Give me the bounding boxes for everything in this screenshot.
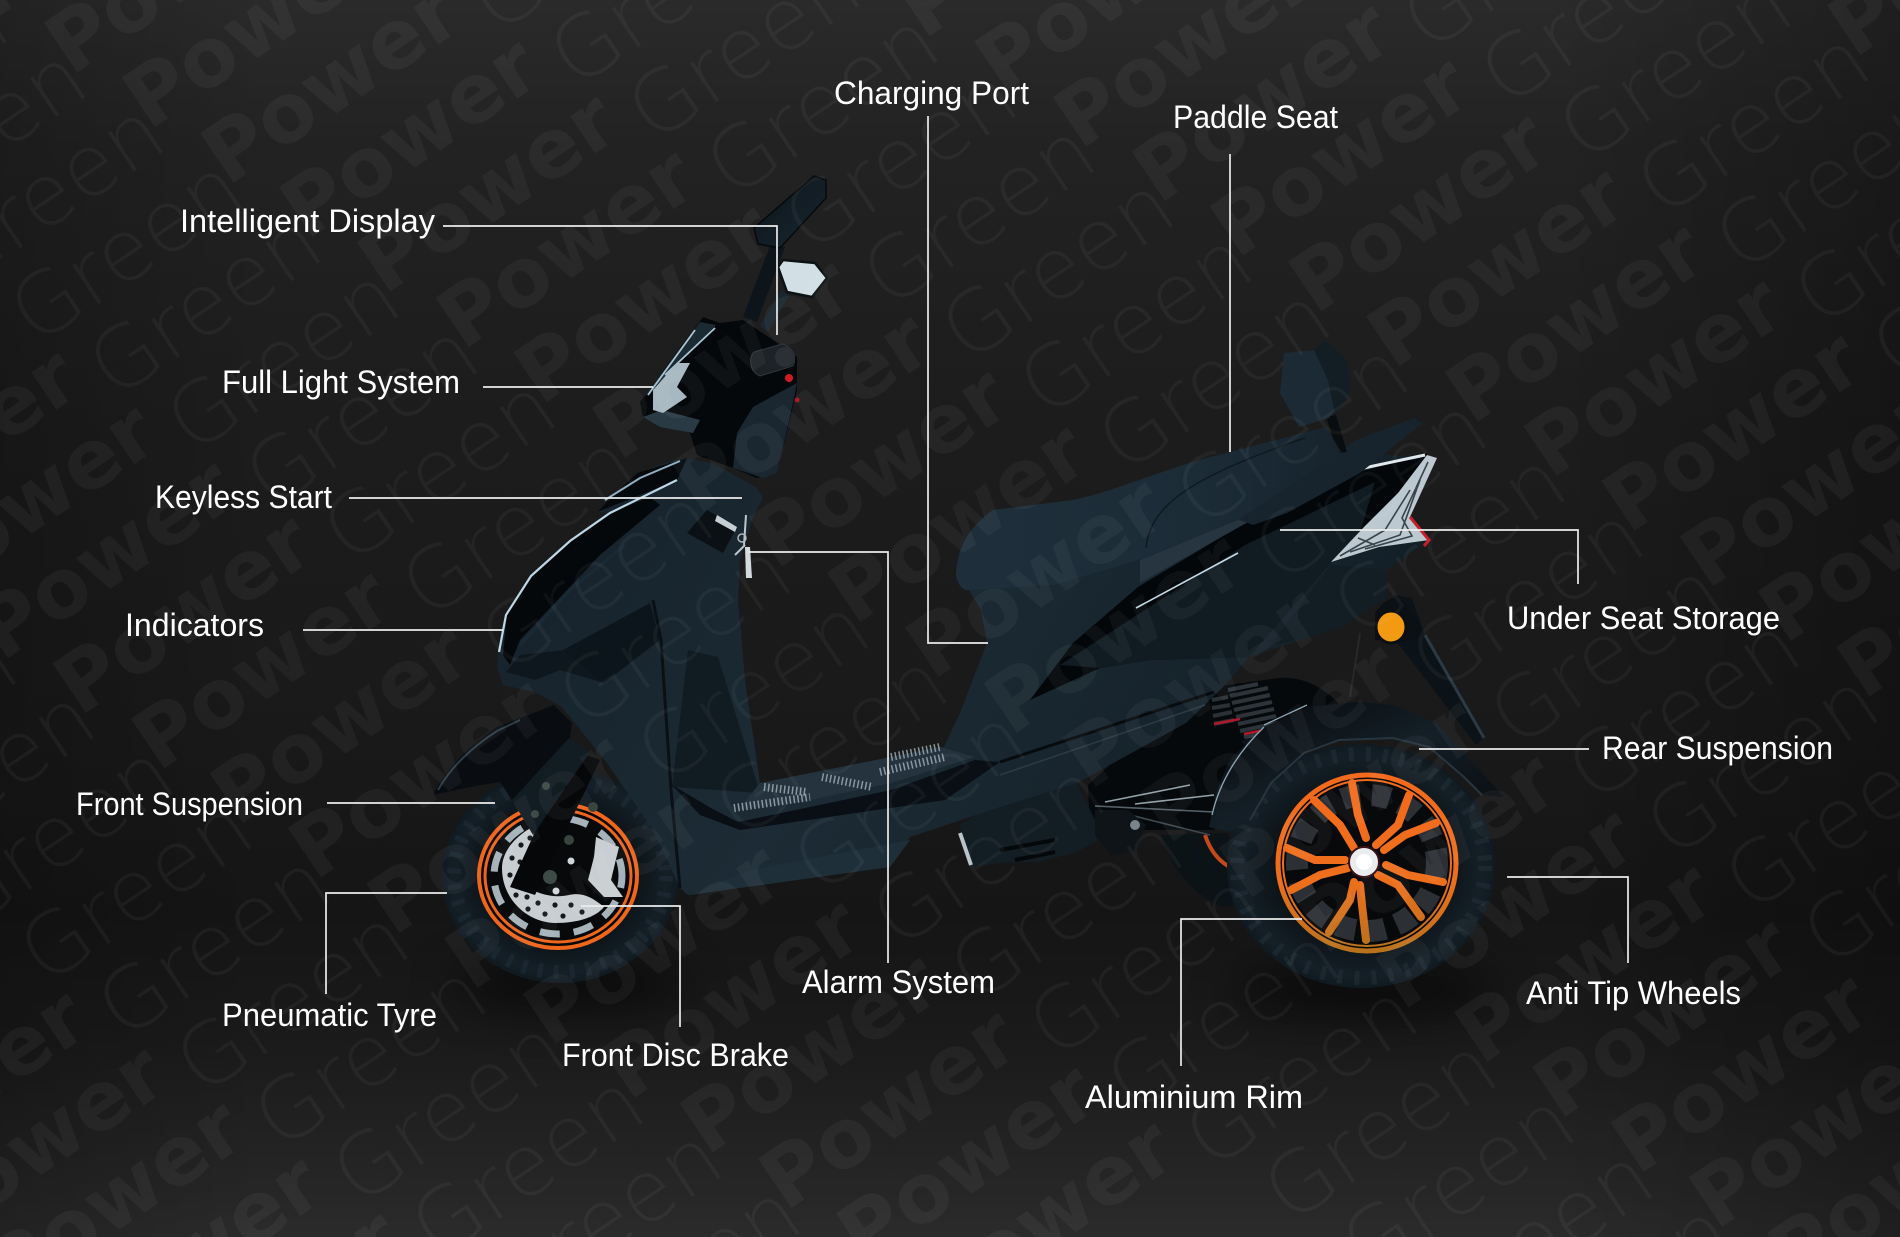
scooter body — [497, 452, 1433, 895]
callout: Front Suspension: Front Suspension — [76, 786, 303, 822]
watermark pattern: Green — [1167, 962, 1436, 1189]
watermark pattern: Power — [38, 493, 330, 734]
glove box and key — [687, 510, 752, 578]
callout: Pneumatic Tyre: Pneumatic Tyre — [222, 997, 437, 1033]
callout: Charging Port: Charging Port — [834, 75, 1029, 111]
watermark pattern: Green — [1158, 321, 1427, 547]
tail light — [1331, 455, 1437, 562]
watermark pattern: Power — [351, 714, 644, 954]
watermark pattern: Green — [149, 247, 418, 473]
watermark pattern: Green — [80, 832, 348, 1058]
callout: Full Light System: Full Light System — [222, 364, 460, 400]
watermark pattern: Power — [1509, 256, 1801, 497]
reflector mount — [1375, 595, 1425, 642]
cockpit panel — [733, 383, 797, 478]
watermark pattern: Green — [0, 138, 261, 364]
callout: Intelligent Display — [180, 203, 777, 335]
rear strut and wire — [1350, 595, 1484, 745]
watermark pattern: Power — [734, 347, 1026, 587]
tail black wedge — [1030, 453, 1433, 700]
watermark pattern: Green — [71, 192, 340, 418]
callout: Pneumatic Tyre — [222, 893, 447, 1033]
front shield black and highlights — [499, 458, 687, 665]
tail top cover — [1240, 418, 1423, 525]
callout: Keyless Start: Keyless Start — [155, 479, 332, 515]
watermark pattern: Power — [1517, 897, 1810, 1137]
rear fender — [1209, 702, 1504, 832]
watermark pattern: Green — [1619, 10, 1888, 236]
callout: Paddle Seat: Paddle Seat — [1173, 99, 1338, 135]
watermark pattern: Power — [1430, 202, 1722, 442]
body lower trim — [506, 600, 1214, 895]
rear wheel — [1227, 744, 1495, 988]
watermark pattern: Green — [1002, 211, 1270, 437]
watermark pattern: Power — [665, 933, 957, 1173]
white mirror — [778, 260, 827, 297]
watermark pattern: Power — [969, 513, 1261, 753]
watermark pattern: Power — [1596, 953, 1888, 1193]
ground shadows — [450, 959, 1500, 1018]
watermark pattern: Green — [1628, 652, 1897, 878]
watermark pattern: Power — [1587, 311, 1879, 551]
callout: Under Seat Storage: Under Seat Storage — [1507, 600, 1780, 636]
rear tyre — [1227, 744, 1495, 988]
callout: Intelligent Display: Intelligent Display — [180, 203, 435, 239]
callout: Anti Tip Wheels: Anti Tip Wheels — [1526, 975, 1741, 1011]
watermark pattern: Power — [1282, 732, 1575, 973]
callout: Rear Suspension: Rear Suspension — [1602, 730, 1833, 766]
callout: Anti Tip Wheels — [1507, 877, 1741, 1011]
watermark pattern: Green — [1011, 852, 1280, 1078]
callout: Charging Port — [834, 75, 1029, 643]
headlight — [653, 363, 690, 413]
callout: Front Disc Brake — [562, 906, 789, 1073]
front tyre — [442, 769, 678, 983]
handle grip — [751, 344, 794, 376]
rim spokes — [1287, 783, 1443, 940]
watermark pattern: Green — [463, 467, 731, 693]
head unit — [640, 176, 827, 478]
watermark pattern: Power — [1351, 147, 1644, 387]
callout: Front Disc Brake: Front Disc Brake — [562, 1037, 789, 1073]
rear rim — [1277, 774, 1457, 952]
watermark pattern: Green — [619, 577, 888, 803]
watermark pattern: Power — [587, 878, 879, 1118]
watermark pattern: Power — [195, 603, 488, 843]
watermark pattern: Green — [315, 998, 583, 1224]
watermark pattern: Green — [1246, 1017, 1515, 1237]
orange reflector — [1376, 611, 1406, 643]
brake disc — [502, 822, 604, 923]
scooter illustration — [433, 176, 1504, 988]
watermark pattern: Green — [1236, 377, 1505, 603]
watermark pattern: Green — [932, 797, 1201, 1023]
watermark pattern: Power — [1126, 622, 1418, 862]
watermark pattern: Power — [1361, 788, 1653, 1028]
watermark pattern: Power — [743, 989, 1036, 1229]
rear spring — [1212, 684, 1278, 737]
watermark pattern: Green — [1080, 266, 1349, 492]
watermark pattern: Power — [273, 658, 565, 898]
watermark pattern: Power — [1048, 567, 1340, 808]
watermark pattern: Power — [264, 17, 557, 258]
callout: Indicators: Indicators — [125, 607, 264, 643]
watermark pattern: Green — [1393, 486, 1662, 712]
right mirror arm — [760, 290, 789, 332]
watermark pattern: Power — [1273, 92, 1566, 332]
watermark pattern: Green — [384, 413, 653, 639]
callout: Under Seat Storage — [1280, 530, 1780, 636]
front wheel — [442, 750, 678, 983]
watermark pattern: Green — [697, 632, 966, 858]
rim hub — [1349, 847, 1379, 877]
callout: Alarm System — [748, 552, 995, 1000]
fork — [510, 750, 600, 895]
brake caliper — [588, 837, 623, 897]
watermark pattern: Power — [342, 72, 635, 312]
watermark pattern: Green — [541, 522, 809, 748]
watermark pattern: Green — [305, 357, 574, 583]
watermark pattern: Green — [1315, 431, 1584, 657]
watermark pattern: Power — [429, 768, 722, 1009]
motor and bracket — [960, 780, 1146, 867]
rear under tail — [1270, 565, 1387, 645]
watermark pattern: Green — [845, 102, 1114, 328]
rear hump behind spring — [1088, 678, 1345, 830]
watermark pattern: Green — [924, 156, 1192, 382]
watermark pattern: Green — [227, 302, 496, 528]
watermark pattern: Power — [1204, 678, 1497, 918]
watermark pattern: Green — [776, 688, 1044, 914]
fairing — [640, 317, 797, 478]
under-seat panel — [1140, 520, 1248, 583]
watermark pattern: Power — [116, 549, 409, 789]
watermark pattern: Power — [421, 128, 713, 368]
backrest — [1280, 341, 1350, 453]
dark mirror — [754, 176, 826, 248]
watermark pattern: Power — [508, 824, 800, 1064]
front rim — [479, 804, 637, 948]
callout: Aluminium Rim: Aluminium Rim — [1085, 1079, 1303, 1115]
watermark pattern: Power — [656, 292, 948, 533]
watermark pattern: Green — [854, 742, 1123, 968]
watermark pattern: Green — [1550, 596, 1818, 822]
watermark pattern: Green — [1089, 907, 1358, 1133]
watermark pattern: Green — [158, 888, 427, 1114]
footboard — [734, 747, 975, 810]
callout: Aluminium Rim — [1085, 919, 1303, 1115]
seat — [956, 427, 1341, 590]
rear second wheel — [1161, 833, 1240, 907]
watermark pattern: Green — [766, 46, 1035, 272]
watermark pattern: Power — [1439, 842, 1732, 1082]
callout: Alarm System: Alarm System — [802, 964, 995, 1000]
watermark pattern: Power — [890, 457, 1183, 698]
watermark pattern: Green — [2, 778, 270, 1004]
watermark pattern: Power — [577, 238, 870, 478]
swingarm struts — [1095, 785, 1214, 835]
watermark pattern: Power — [1195, 36, 1487, 276]
watermark pattern: Power — [499, 182, 791, 423]
left mirror arm — [743, 243, 785, 322]
seat stitch — [1146, 438, 1305, 548]
watermark pattern: Power — [812, 403, 1105, 643]
watermark pattern: Green — [236, 943, 505, 1169]
front mudguard — [433, 705, 590, 835]
watermark pattern: Green — [1472, 541, 1741, 767]
